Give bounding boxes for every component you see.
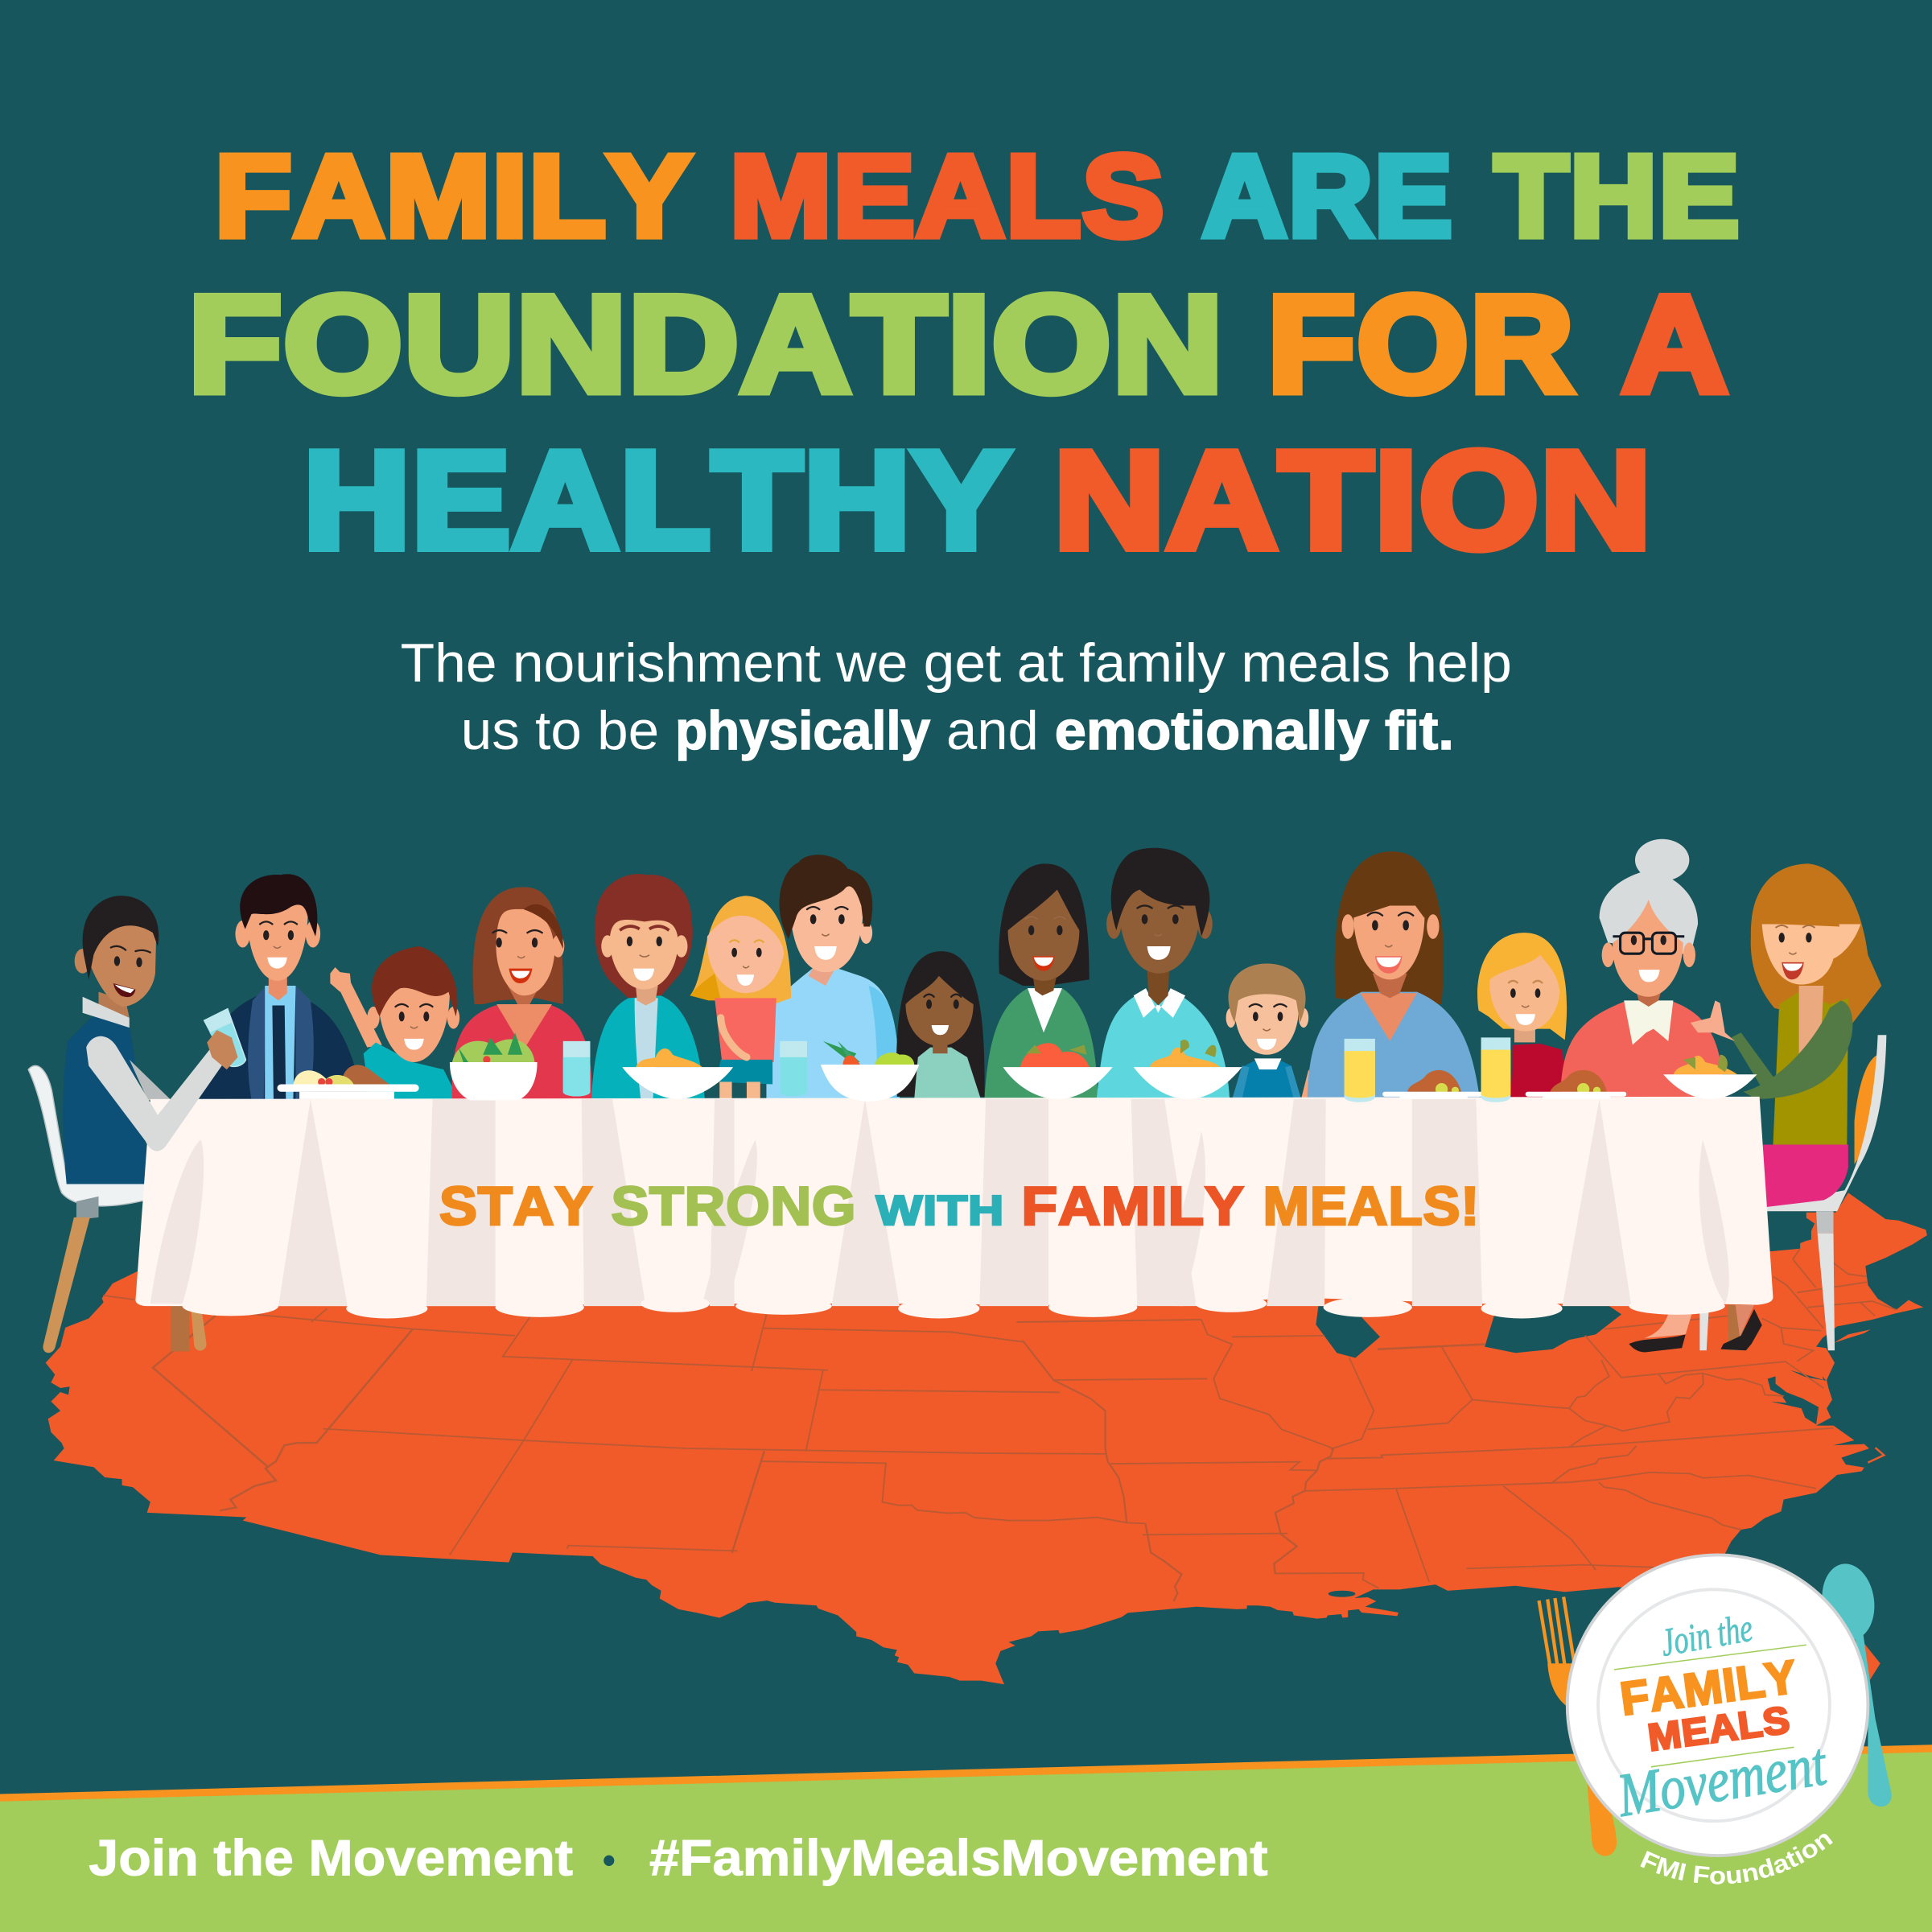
subtitle [401,633,1512,761]
plate logo [1567,1555,1868,1856]
yellow food bowl [1134,1040,1242,1099]
plate with roast [1382,1070,1484,1099]
subtitle: emotionally fit. [1055,701,1454,761]
juice glass [1345,1039,1375,1102]
person: seated man, left end [63,896,171,1184]
seated man's arm and glass [86,1008,246,1151]
yellow bowl [622,1048,733,1099]
Outer Banks [1868,1448,1884,1463]
table scallops [183,1295,1725,1318]
vegetable bowl [821,1041,919,1102]
person: woman in green cardigan [984,863,1098,1099]
person: small girl with long dark hair [896,951,985,1099]
icon: fork [1539,1596,1617,1856]
title: MEALS [730,131,1166,261]
water glass [780,1041,807,1096]
plate logo: FAMILY [1617,1650,1800,1725]
person: boy in blue shirt [1226,963,1315,1099]
person: woman with curly hair [591,874,705,1099]
footer text: • [603,1839,616,1881]
left plate with food [278,1065,419,1099]
person: man in light blue shirt [766,855,900,1099]
table text: STAY [439,1176,593,1237]
title: THE [1494,131,1741,261]
red food bowl [1003,1043,1113,1099]
Long Island [1833,1329,1870,1343]
salad bowl [450,1032,538,1100]
subtitle: physically [675,701,931,761]
footer band [0,1745,1932,1932]
footer text [89,1831,1268,1887]
footer text: #FamilyMealsMovement [649,1831,1268,1887]
title: ARE [1202,131,1454,261]
plate with roast [1526,1070,1626,1099]
title: FOR [1268,268,1576,421]
food and tableware [278,1032,1757,1102]
plate logo: Movement [1613,1729,1831,1830]
table text [439,1176,1480,1237]
person: man in suit [200,874,364,1099]
person: man in cyan sweater [1097,848,1230,1099]
juice glass [1481,1037,1510,1102]
person: woman in blue top [1308,851,1480,1099]
person: woman in red top [452,887,591,1099]
title: FOUNDATION [188,268,1225,421]
great lakes and bays [1316,1306,1869,1597]
person: blonde girl [690,896,791,1100]
plate logo: MEALS [1646,1699,1793,1760]
small yellow bowl [1663,1055,1757,1099]
footer text: Join the Movement [89,1831,573,1887]
table text: WITH [876,1188,1004,1234]
person: grandmother with glasses [1560,839,1724,1099]
person: boy waving [330,946,459,1099]
subtitle: us to be [461,701,659,761]
person: blonde child in red [1477,933,1567,1099]
FMI Foundation curved label: FMI Foundation [1640,1834,1833,1885]
subtitle: The nourishment we get at family meals help [401,633,1512,694]
water glass [563,1041,590,1096]
title: HEALTHY [303,424,1012,578]
tablecloth [135,1097,1773,1318]
title: NATION [1054,424,1653,578]
subtitle: and [946,701,1039,761]
right chair [1699,1035,1886,1350]
table text: MEALS! [1263,1176,1480,1237]
plate logo: Join the [1658,1605,1756,1665]
map of the United States [46,1193,1927,1712]
icon: spoon [1817,1560,1892,1806]
table pleats [150,1099,1729,1306]
table text: FAMILY [1021,1176,1245,1237]
title [188,131,1741,578]
table text: STRONG [612,1176,856,1237]
title: FAMILY [215,131,693,261]
left chair [28,1065,207,1353]
state borders [103,1249,1897,1601]
title: A [1622,268,1729,421]
person: seated woman, right end [1629,863,1881,1353]
